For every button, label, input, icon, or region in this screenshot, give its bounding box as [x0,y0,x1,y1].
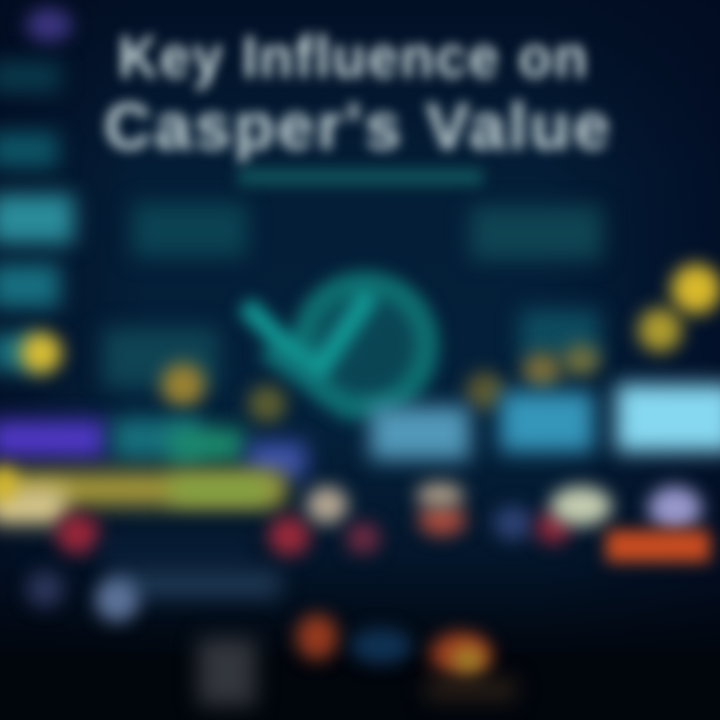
gold dot [671,264,720,314]
blue block [248,442,306,478]
subtitle [238,168,483,186]
teal block [112,418,202,460]
dim dot [26,570,64,608]
yellow accent [452,646,484,676]
red light [268,516,310,556]
panel: light blue screens [100,366,720,492]
gold dot [562,344,600,376]
title line 1: Key Influence on [118,25,589,90]
green block [170,428,244,462]
cream light [416,482,464,508]
panel: left column [0,0,116,471]
cream light [306,486,348,524]
grey device [198,638,256,706]
icon: gold dots row [149,250,720,432]
panel: bottom icons [188,602,521,716]
screen 1 [370,406,470,460]
gold dot [522,352,562,388]
red light [346,522,380,554]
gold dot [638,308,682,352]
left bar 1 [0,62,60,92]
panel: yellow strip [0,453,300,542]
purple bar [0,420,106,458]
left bar 4 [0,264,60,308]
lilac light [648,486,702,530]
navy light [493,506,533,540]
orange icon [296,614,338,660]
left bar 5 [0,333,38,371]
icon: central teal logo [232,262,448,429]
yellow tip [0,466,16,502]
red light [536,512,570,544]
dim base [426,678,516,700]
dark hood [100,540,250,564]
screen 3 [616,384,720,452]
panel: mid right label [520,310,600,360]
panel: lower left vehicle [19,534,288,634]
orange bar [606,530,710,562]
red yellow icon [430,632,492,676]
left bar 3 [0,194,74,244]
panel: upper right label [470,206,602,260]
red light [56,514,100,554]
glow [0,488,66,524]
gold dot [466,372,504,410]
left bar 2 [0,132,58,168]
gold dot [248,385,286,423]
blue icon [350,628,412,664]
gold dot [161,363,205,407]
panel: mid left label [103,328,218,388]
orange red light [418,504,466,536]
screen 2 [500,392,594,452]
icon: yellow coin left [20,332,62,374]
title line 2: Casper's Value [104,89,613,163]
strip [0,472,285,506]
panel: red and white lights row [45,470,720,575]
panel: upper left label [132,203,247,257]
icon: purple marker [26,8,72,42]
title [98,25,616,169]
light dot [95,578,139,622]
white light [550,486,612,526]
green tint [170,478,270,502]
grey blue stripe [110,570,280,598]
